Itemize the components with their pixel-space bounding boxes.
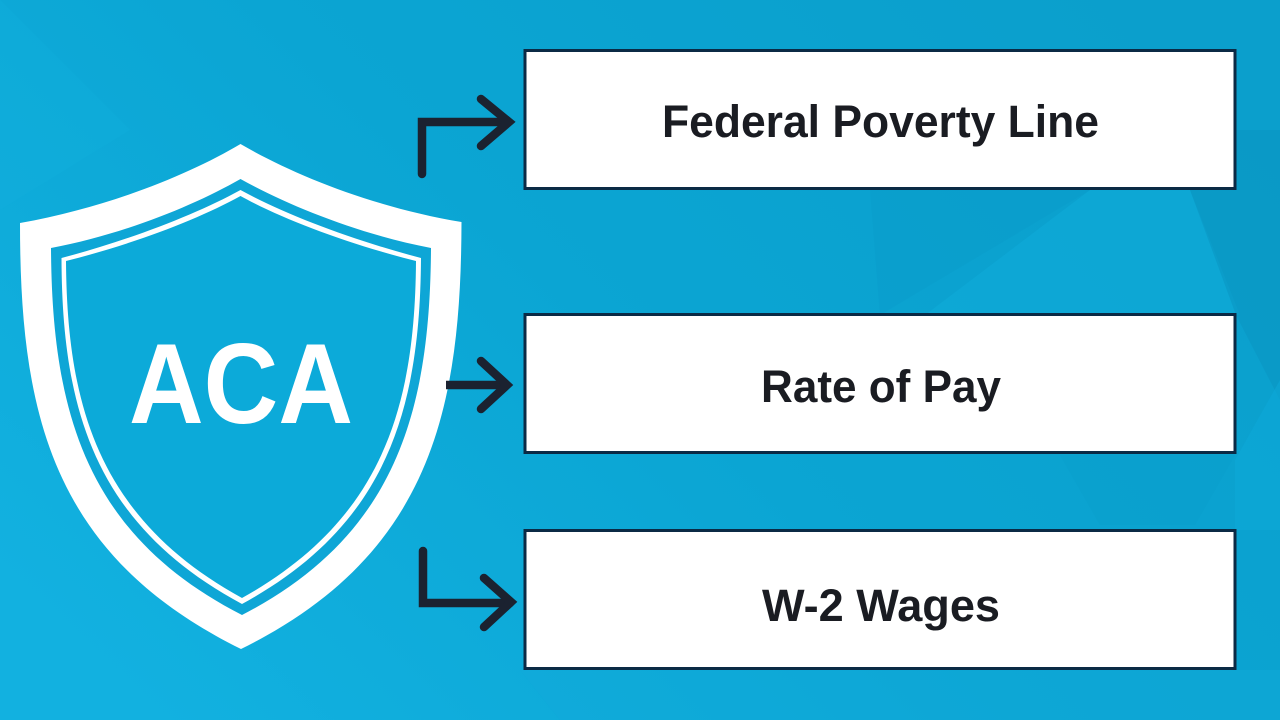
panel: Rate of Pay: Rate of Pay [761, 361, 1001, 412]
arrow: to Rate of Pay [446, 361, 507, 409]
panel: Federal Poverty Line [525, 50, 1235, 188]
panel: Federal Poverty Line: Federal Poverty Line [662, 96, 1099, 147]
shield label: ACA [129, 321, 353, 448]
panel: W-2 Wages [525, 530, 1235, 668]
icon: ACA shield [20, 144, 462, 649]
panel: Rate of Pay [525, 314, 1235, 452]
arrow: to W-2 Wages [423, 551, 511, 627]
panel: W-2 Wages: W-2 Wages [762, 580, 1000, 631]
arrow: to Federal Poverty Line [422, 99, 509, 174]
